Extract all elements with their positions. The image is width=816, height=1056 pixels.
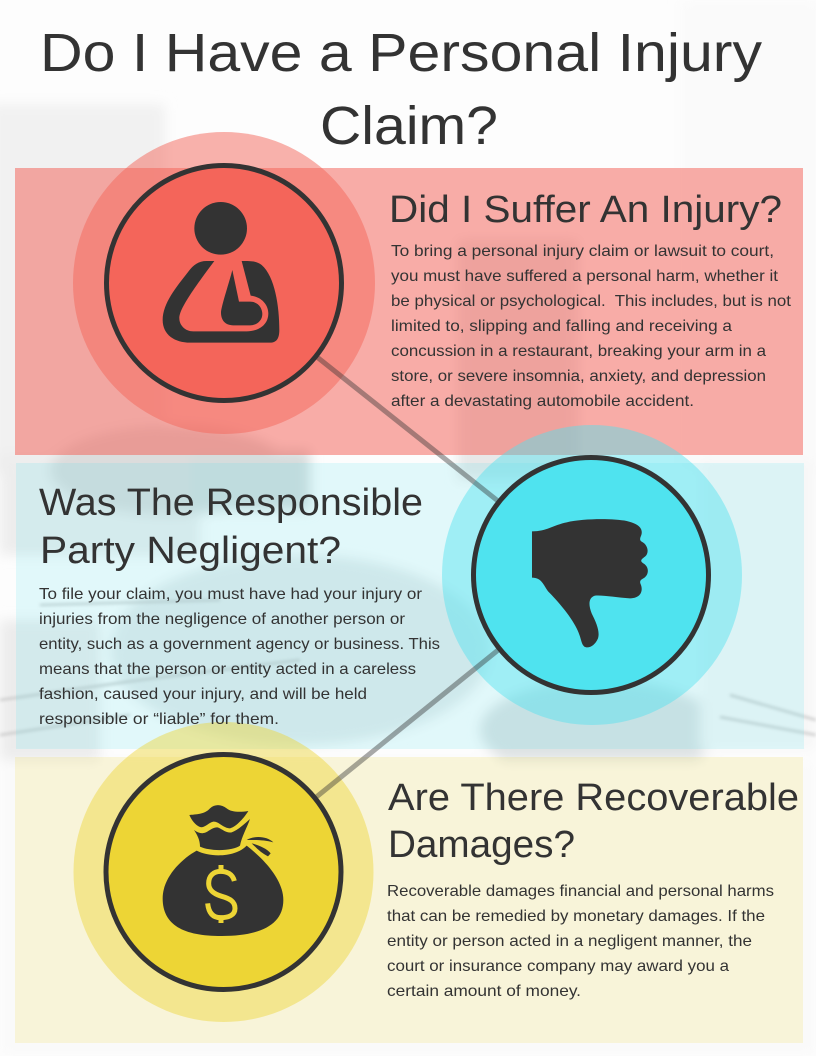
body text: fashion, caused your injury, and will be held (39, 686, 367, 703)
circle: negligence (474, 458, 708, 692)
body text: you must have suffered a personal harm, whether it (391, 268, 779, 285)
body text: entity or person acted in a negligent manner, the (387, 933, 752, 950)
panel: injury background (15, 168, 803, 455)
halo: damages circle (74, 722, 374, 1022)
body text: injuries from the negligence of another person or (39, 611, 406, 628)
body text (387, 883, 774, 1000)
body text: responsible or “liable” for them. (39, 711, 279, 728)
heading: Did I Suffer An Injury? (389, 189, 782, 231)
heading: Damages? (388, 824, 575, 866)
title: Do I Have a Personal Injury (40, 23, 762, 83)
icon: person with arm in sling (163, 202, 279, 343)
icon: money bag with dollar sign (163, 805, 283, 936)
body text: Recoverable damages financial and personal harms (387, 883, 774, 900)
icon: thumbs down (532, 519, 648, 647)
section: was the responsible party negligent (39, 482, 440, 728)
circle: damages (106, 754, 341, 990)
section: are there recoverable damages (387, 777, 799, 1000)
connector: damages to negligence (224, 575, 591, 872)
body text: store, or severe insomnia, anxiety, and depression (391, 368, 766, 385)
title (40, 23, 762, 156)
halo: negligence circle (442, 425, 742, 725)
body text: that can be remedied by monetary damages. If the (387, 908, 765, 925)
body text: certain amount of money. (387, 983, 581, 1000)
body text: To file your claim, you must have had your injury or (39, 586, 423, 603)
heading: Are There Recoverable (388, 777, 799, 819)
panel: damages background (15, 757, 803, 1043)
heading: Was The Responsible (39, 482, 423, 524)
title: Claim? (320, 96, 498, 156)
heading: Party Negligent? (40, 530, 341, 572)
heading (39, 482, 423, 572)
body text: means that the person or entity acted in a careless (39, 661, 416, 678)
panel: negligence background (16, 463, 804, 749)
circle: injury (106, 166, 342, 400)
body text: be physical or psychological. This includes, but is not (391, 293, 792, 310)
body text (39, 586, 440, 728)
body text: To bring a personal injury claim or lawsuit to court, (391, 243, 774, 260)
heading (388, 777, 799, 866)
connector: injury to negligence (224, 283, 591, 575)
body text: after a devastating automobile accident. (391, 393, 694, 410)
body text: limited to, slipping and falling and receiving a (391, 318, 732, 335)
body text: court or insurance company may award you a (387, 958, 729, 975)
body text (391, 243, 792, 410)
body text: entity, such as a government agency or business. This (39, 636, 440, 653)
section: did I suffer an injury (389, 189, 792, 410)
halo: injury circle (73, 132, 375, 434)
body text: concussion in a restaurant, breaking your arm in a (391, 343, 766, 360)
